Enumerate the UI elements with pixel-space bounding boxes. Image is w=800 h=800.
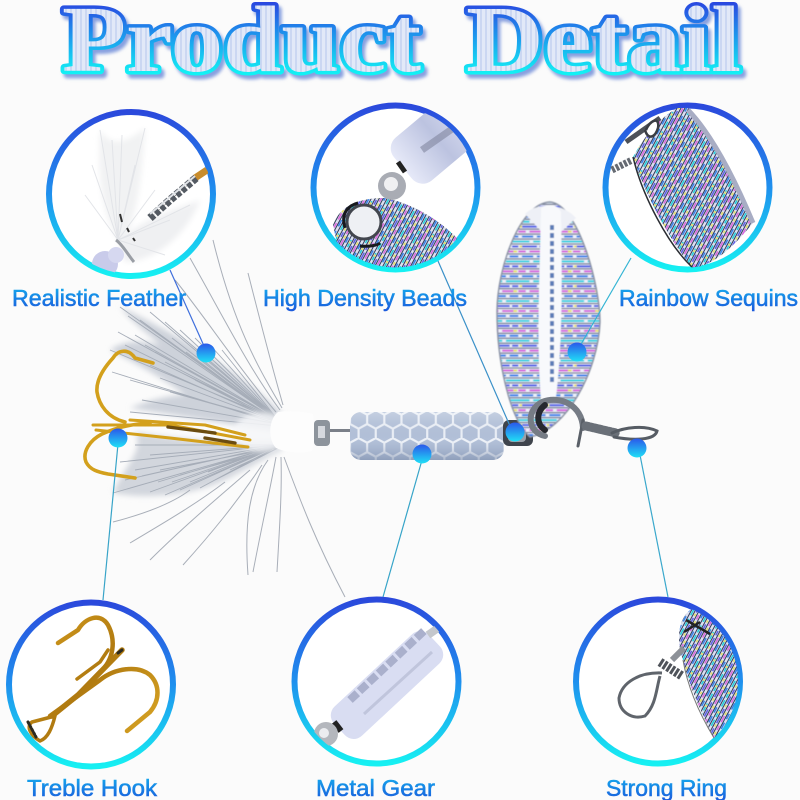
panel: treble hook xyxy=(9,602,173,800)
feather inset photo xyxy=(85,128,207,277)
panel: rainbow sequins xyxy=(606,106,798,311)
treble hook inset photo xyxy=(28,618,158,741)
lure white thread wrap xyxy=(270,411,314,452)
beads inset circle xyxy=(314,106,478,270)
lure gear body xyxy=(350,412,504,460)
lure silver bead and rod xyxy=(314,420,352,446)
strong ring inset photo xyxy=(618,610,738,738)
lure feather mass xyxy=(110,240,345,597)
callout dots xyxy=(108,342,646,464)
callout lines xyxy=(103,258,668,600)
label: high density beads: High Density Beads xyxy=(263,285,467,311)
panel: realistic feather xyxy=(12,112,213,311)
lure front bead xyxy=(503,420,533,446)
panel: high density beads xyxy=(264,102,480,312)
main lure: whole spinner photo illustration xyxy=(85,202,657,597)
lure swivel and ring xyxy=(531,400,657,446)
beads inset photo xyxy=(333,113,467,268)
strong ring inset circle xyxy=(576,600,740,764)
label: realistic feather: Realistic Feather xyxy=(12,285,186,311)
metal gear inset circle xyxy=(294,600,458,764)
sequins inset circle xyxy=(606,106,770,270)
lure rainbow spinner blade xyxy=(497,202,600,437)
treble hook on lure xyxy=(85,351,250,478)
panel: metal gear xyxy=(294,600,458,800)
metal gear inset photo xyxy=(314,626,448,746)
sequins inset photo xyxy=(612,108,753,268)
feather inset circle xyxy=(49,112,213,276)
label: rainbow sequins: Rainbow Sequins xyxy=(619,285,798,311)
treble hook inset circle xyxy=(9,602,173,766)
panel: strong ring xyxy=(576,600,750,800)
